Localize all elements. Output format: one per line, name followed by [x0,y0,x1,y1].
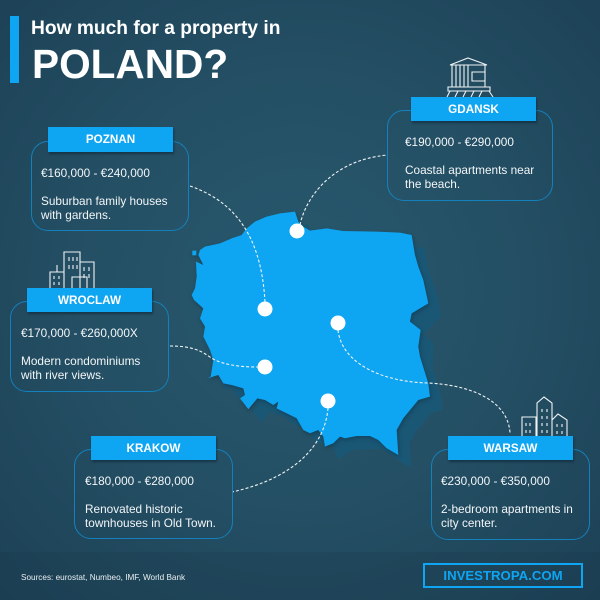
brand box [423,563,583,588]
connector: Wroclaw [170,346,258,367]
title accent bar [10,16,19,83]
title: POLAND? [32,41,228,87]
panel: Warsaw [431,436,590,540]
panel: Krakow [74,436,233,539]
panel: Krakow: townhouses in Old Town. [85,516,216,530]
map shadow [205,225,443,468]
panel: Gdansk: the beach. [405,177,460,191]
marker: Gdansk [290,224,304,238]
marker: Warsaw [330,316,346,330]
panel: Krakow: €180,000 - €280,000 [85,474,194,488]
panel: Poznan [31,127,189,231]
panel: Warsaw: WARSAW [484,442,537,455]
panel: Gdansk: Coastal apartments near [405,163,534,177]
icon: beach house [447,58,493,97]
panel: Poznan: €160,000 - €240,000 [41,166,150,180]
title [31,18,280,87]
panel: Wroclaw: Modern condominiums [21,354,140,368]
panel: Wroclaw: €170,000 - €260,000X [21,326,138,340]
connector: Krakow [232,408,328,492]
panel: Gdansk: €190,000 - €290,000 [405,135,514,149]
panel: Warsaw: €230,000 - €350,000 [441,474,550,488]
panel: Wroclaw [10,288,169,392]
panel: Warsaw: city center. [441,516,497,530]
footer band [0,552,600,600]
marker: Krakow [320,394,336,408]
connector: Gdansk [300,155,388,225]
panel: Gdansk: GDANSK [448,103,499,116]
icon: Warsaw buildings [522,397,567,436]
connector: Poznan [190,186,265,302]
brand box: INVESTROPA.COM [443,568,563,583]
connector: Warsaw [338,330,510,433]
marker: Poznan [258,302,272,316]
panel: Wroclaw: WROCLAW [58,294,121,307]
panel: Krakow: KRAKOW [127,442,180,455]
panel: Gdansk [387,97,553,201]
panel: Poznan: with gardens. [41,208,111,222]
icon: Wroclaw buildings [50,252,94,288]
panel: Warsaw: 2-bedroom apartments in [441,502,573,516]
panel: Poznan: Suburban family houses [41,194,168,208]
title: How much for a property in [31,18,280,39]
marker: Wroclaw [258,360,272,374]
panel: Wroclaw: with river views. [21,368,104,382]
panel: Krakow: Renovated historic [85,502,183,516]
panel: Poznan: POZNAN [86,133,135,146]
sources: Sources: eurostat, Numbeo, IMF, World Bank [21,573,185,582]
map of Poland [192,212,430,455]
